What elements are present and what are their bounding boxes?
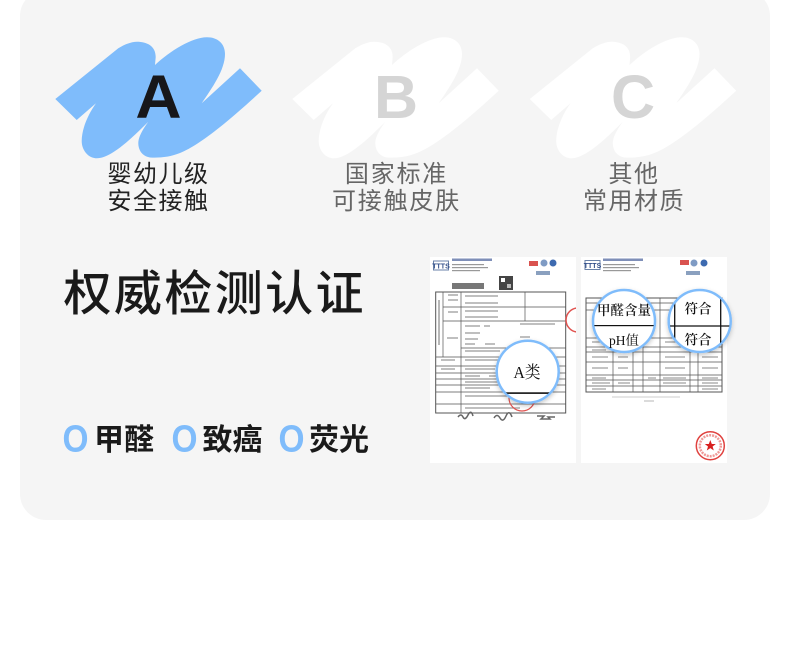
label: grade A description: 安全接触 [108, 181, 210, 216]
red inspection stamp [696, 432, 724, 460]
report table [436, 292, 566, 413]
infographic canvas [20, 0, 770, 520]
grade A: infant level [55, 37, 262, 216]
magnifier: grade A callout: A类 [514, 362, 540, 382]
icon: white brush stroke [292, 37, 499, 158]
feature: zero formaldehyde: O [62, 418, 89, 460]
feature: zero carcinogen [172, 415, 262, 460]
feature: zero fluorescer: O [278, 418, 305, 460]
icon: white brush stroke [530, 37, 736, 158]
report letterhead [432, 258, 556, 290]
letter A: A [135, 63, 182, 132]
feature list: zero formaldehyde, carcinogen, fluorescer [62, 415, 369, 460]
label: grade A description: 婴幼儿级 [108, 154, 210, 189]
test report page 1 [430, 257, 590, 463]
letter B: B [374, 63, 418, 131]
feature: zero carcinogen: O [172, 418, 198, 460]
heading: authoritative testing certification: 权威检测认证 [64, 254, 366, 324]
label: grade C description: 其他 [608, 154, 660, 189]
letter C: C [611, 63, 655, 131]
grade B: national standard [292, 37, 499, 216]
label: grade C description: 常用材质 [583, 181, 685, 216]
grade C: common materials [530, 37, 736, 216]
report sheet [581, 257, 727, 463]
label: grade B description: 可接触皮肤 [332, 181, 461, 216]
test report page 2 [581, 257, 732, 463]
magnifier: compliant results [668, 290, 732, 352]
magnifier: formaldehyde and pH: pH值 [609, 332, 639, 348]
report letterhead: TTTS [432, 264, 450, 270]
icon: blue brush stroke [55, 37, 262, 158]
magnifier: formaldehyde and pH [592, 290, 656, 352]
report table [586, 298, 722, 401]
report letterhead [584, 258, 708, 275]
magnifier: grade A callout [497, 341, 559, 403]
report letterhead: TTTS [584, 263, 602, 270]
magnifier: compliant results: 符合 [684, 332, 712, 348]
feature: zero carcinogen: 致癌 [202, 415, 262, 459]
report sheet [430, 257, 576, 463]
magnifier: compliant results: 符合 [684, 300, 712, 316]
label: grade B description: 国家标准 [345, 154, 448, 189]
magnifier: formaldehyde and pH: 甲醛含量 [597, 302, 651, 318]
feature: zero fluorescer: 荧光 [309, 415, 369, 459]
panel: grey background card [20, 0, 770, 520]
feature: zero formaldehyde [62, 415, 154, 460]
feature: zero fluorescer [278, 415, 369, 460]
feature: zero formaldehyde: 甲醛 [94, 415, 154, 459]
stamp and signatures [458, 308, 590, 420]
